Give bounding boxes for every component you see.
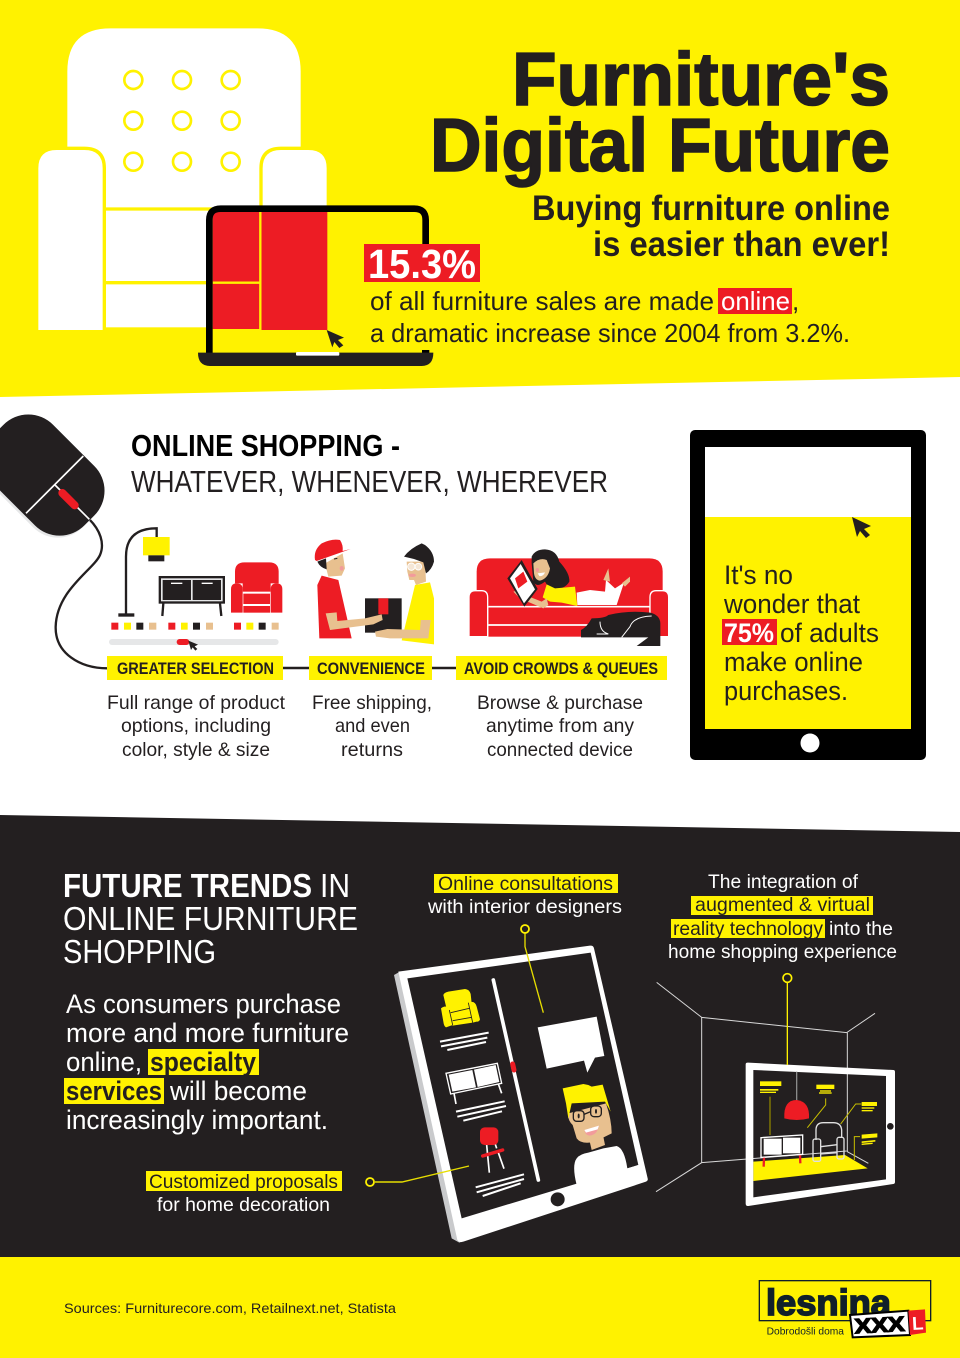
callout: augmented reality: reality technology	[673, 918, 823, 940]
title	[430, 37, 890, 187]
text: crowds description: Browse & purchase	[477, 692, 643, 714]
logo: lesnina XXXL: L	[911, 1312, 924, 1334]
statistic: 15.3%: 15.3%	[368, 241, 476, 287]
heading: future trends	[63, 867, 358, 970]
title: Digital Future	[430, 103, 890, 187]
illustration: delivery handover	[315, 540, 434, 644]
logo: lesnina XXXL	[759, 1281, 931, 1338]
text: specialty services paragraph: more and more furniture	[66, 1018, 349, 1048]
pointer line: consultations	[525, 933, 543, 1013]
subtitle: Buying furniture online	[532, 189, 890, 228]
text: convenience description: Free shipping,	[312, 692, 432, 714]
text: 75% of adults	[722, 560, 879, 706]
text: 75% of adults: of adults	[780, 618, 879, 648]
callout: customized proposals: Customized proposals	[149, 1171, 338, 1193]
text: specialty services paragraph: specialty	[150, 1047, 256, 1077]
illustration: sofa and dog	[469, 558, 669, 646]
text: specialty services paragraph	[64, 989, 349, 1135]
callout: augmented reality: augmented & virtual	[695, 894, 870, 916]
illustration: tablet with interior designer	[394, 946, 648, 1243]
text: crowds description	[477, 692, 643, 761]
text: selection description	[107, 692, 286, 761]
text: convenience description: returns	[341, 739, 403, 761]
label: convenience: CONVENIENCE	[317, 659, 425, 678]
heading: future trends: FUTURE TRENDS	[63, 867, 312, 904]
panel: tablet callout	[690, 430, 926, 760]
callout: augmented reality: The integration of	[708, 871, 859, 893]
heading: future trends: IN	[320, 867, 350, 904]
text: 75% of adults: It's no	[724, 560, 793, 590]
panel: future trends background	[0, 815, 960, 1257]
text: convenience description: and even	[335, 715, 410, 737]
icon: laptop	[198, 209, 433, 366]
heading: future trends: SHOPPING	[63, 933, 216, 970]
text: convenience description	[312, 692, 432, 761]
title: Furniture's	[512, 37, 890, 121]
panel: header	[0, 0, 960, 397]
icon: red chair	[480, 1127, 504, 1173]
subtitle	[532, 189, 890, 264]
callout: augmented reality: into the	[829, 918, 893, 940]
text: online sales statistic: a dramatic increase since 2004 from 3.2%.	[370, 318, 850, 348]
subtitle: is easier than ever!	[593, 225, 890, 264]
text: crowds description: connected device	[487, 739, 633, 761]
pointer: customized proposals	[366, 1166, 469, 1186]
illustration: augmented reality room	[656, 974, 895, 1206]
label: greater selection: GREATER SELECTION	[117, 659, 274, 678]
logo: lesnina XXXL: XXX	[854, 1313, 905, 1338]
panel: footer background	[0, 1257, 960, 1358]
text: selection description: options, including	[121, 715, 271, 737]
text: selection description: color, style & size	[122, 739, 270, 761]
callout: augmented reality: home shopping experience	[668, 941, 897, 963]
label: avoid crowds and queues: AVOID CROWDS & QUEUES	[464, 659, 658, 678]
heading: future trends: ONLINE FURNITURE	[63, 900, 358, 937]
text: specialty services paragraph: As consumers purchase	[66, 989, 341, 1019]
text: 75% of adults: purchases.	[724, 676, 848, 706]
text: sources: Sources: Furniturecore.com, Retailnext.net, Statista	[64, 1300, 396, 1316]
pointer dot: consultations	[521, 925, 529, 933]
callout: augmented reality	[668, 871, 897, 963]
icon: armchair	[37, 28, 328, 330]
text: 75% of adults: wonder that	[723, 589, 860, 619]
callout: online consultations	[427, 873, 622, 918]
text: specialty services paragraph: online,	[66, 1047, 142, 1077]
text: crowds description: anytime from any	[486, 715, 634, 737]
text: online sales statistic: online	[721, 286, 790, 316]
text: online sales statistic	[370, 286, 850, 348]
text: selection description: Full range of product	[107, 692, 286, 714]
callout: online consultations: Online consultations	[438, 873, 613, 895]
text: online sales statistic: ,	[792, 286, 799, 316]
icon: computer mouse with cable	[0, 400, 119, 668]
logo: lesnina XXXL: Dobrodošli doma	[767, 1326, 845, 1337]
callout: customized proposals: for home decoration	[157, 1194, 330, 1216]
icon: white sideboard	[446, 1063, 502, 1104]
heading: online shopping: WHATEVER, WHENEVER, WHEREVER	[131, 464, 608, 499]
illustration: woman with tablet	[507, 549, 630, 608]
callout: customized proposals	[146, 1171, 342, 1216]
connector lines	[283, 667, 456, 669]
heading: online shopping: ONLINE SHOPPING -	[131, 428, 400, 463]
text: 75% of adults: 75%	[724, 618, 774, 648]
label: convenience	[309, 656, 432, 680]
icon: yellow armchair	[441, 989, 480, 1027]
text: 75% of adults: make online	[724, 647, 863, 677]
callout: online consultations: with interior designers	[427, 896, 622, 918]
heading: online shopping	[131, 428, 608, 499]
illustration: greater selection furniture	[109, 528, 282, 651]
text: specialty services paragraph: services	[66, 1076, 162, 1106]
label: avoid crowds and queues	[456, 656, 667, 680]
icon: designer portrait	[563, 1084, 612, 1150]
label: greater selection	[107, 656, 283, 680]
text: online sales statistic: of all furniture sales are made	[370, 286, 714, 316]
logo: lesnina XXXL: lesnina	[766, 1282, 892, 1323]
text: specialty services paragraph: increasingly important.	[66, 1105, 328, 1135]
text: specialty services paragraph: will become	[169, 1076, 307, 1106]
